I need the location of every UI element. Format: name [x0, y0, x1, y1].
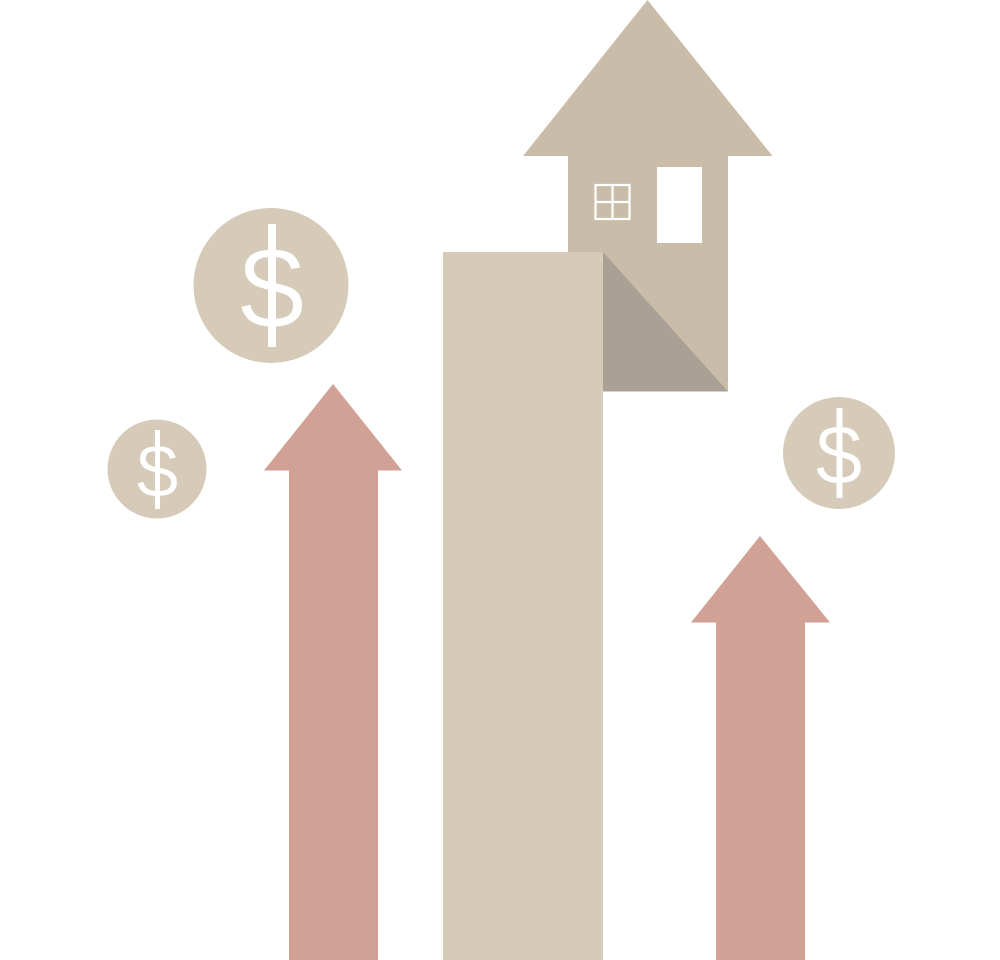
- left arrow: [264, 384, 402, 960]
- house door: [657, 167, 702, 243]
- small dollar coin: [108, 420, 206, 518]
- large dollar coin: $: [240, 223, 304, 353]
- central tall column: [443, 252, 603, 960]
- right dollar coin: [783, 397, 895, 509]
- folded shadow: [603, 252, 728, 392]
- house: [523, 0, 772, 392]
- small dollar coin: $: [137, 429, 178, 513]
- large dollar coin: [194, 208, 348, 363]
- house window: [596, 185, 630, 219]
- house body and roof: [523, 0, 772, 391]
- right dollar coin: $: [816, 408, 862, 502]
- right arrow: [691, 536, 830, 960]
